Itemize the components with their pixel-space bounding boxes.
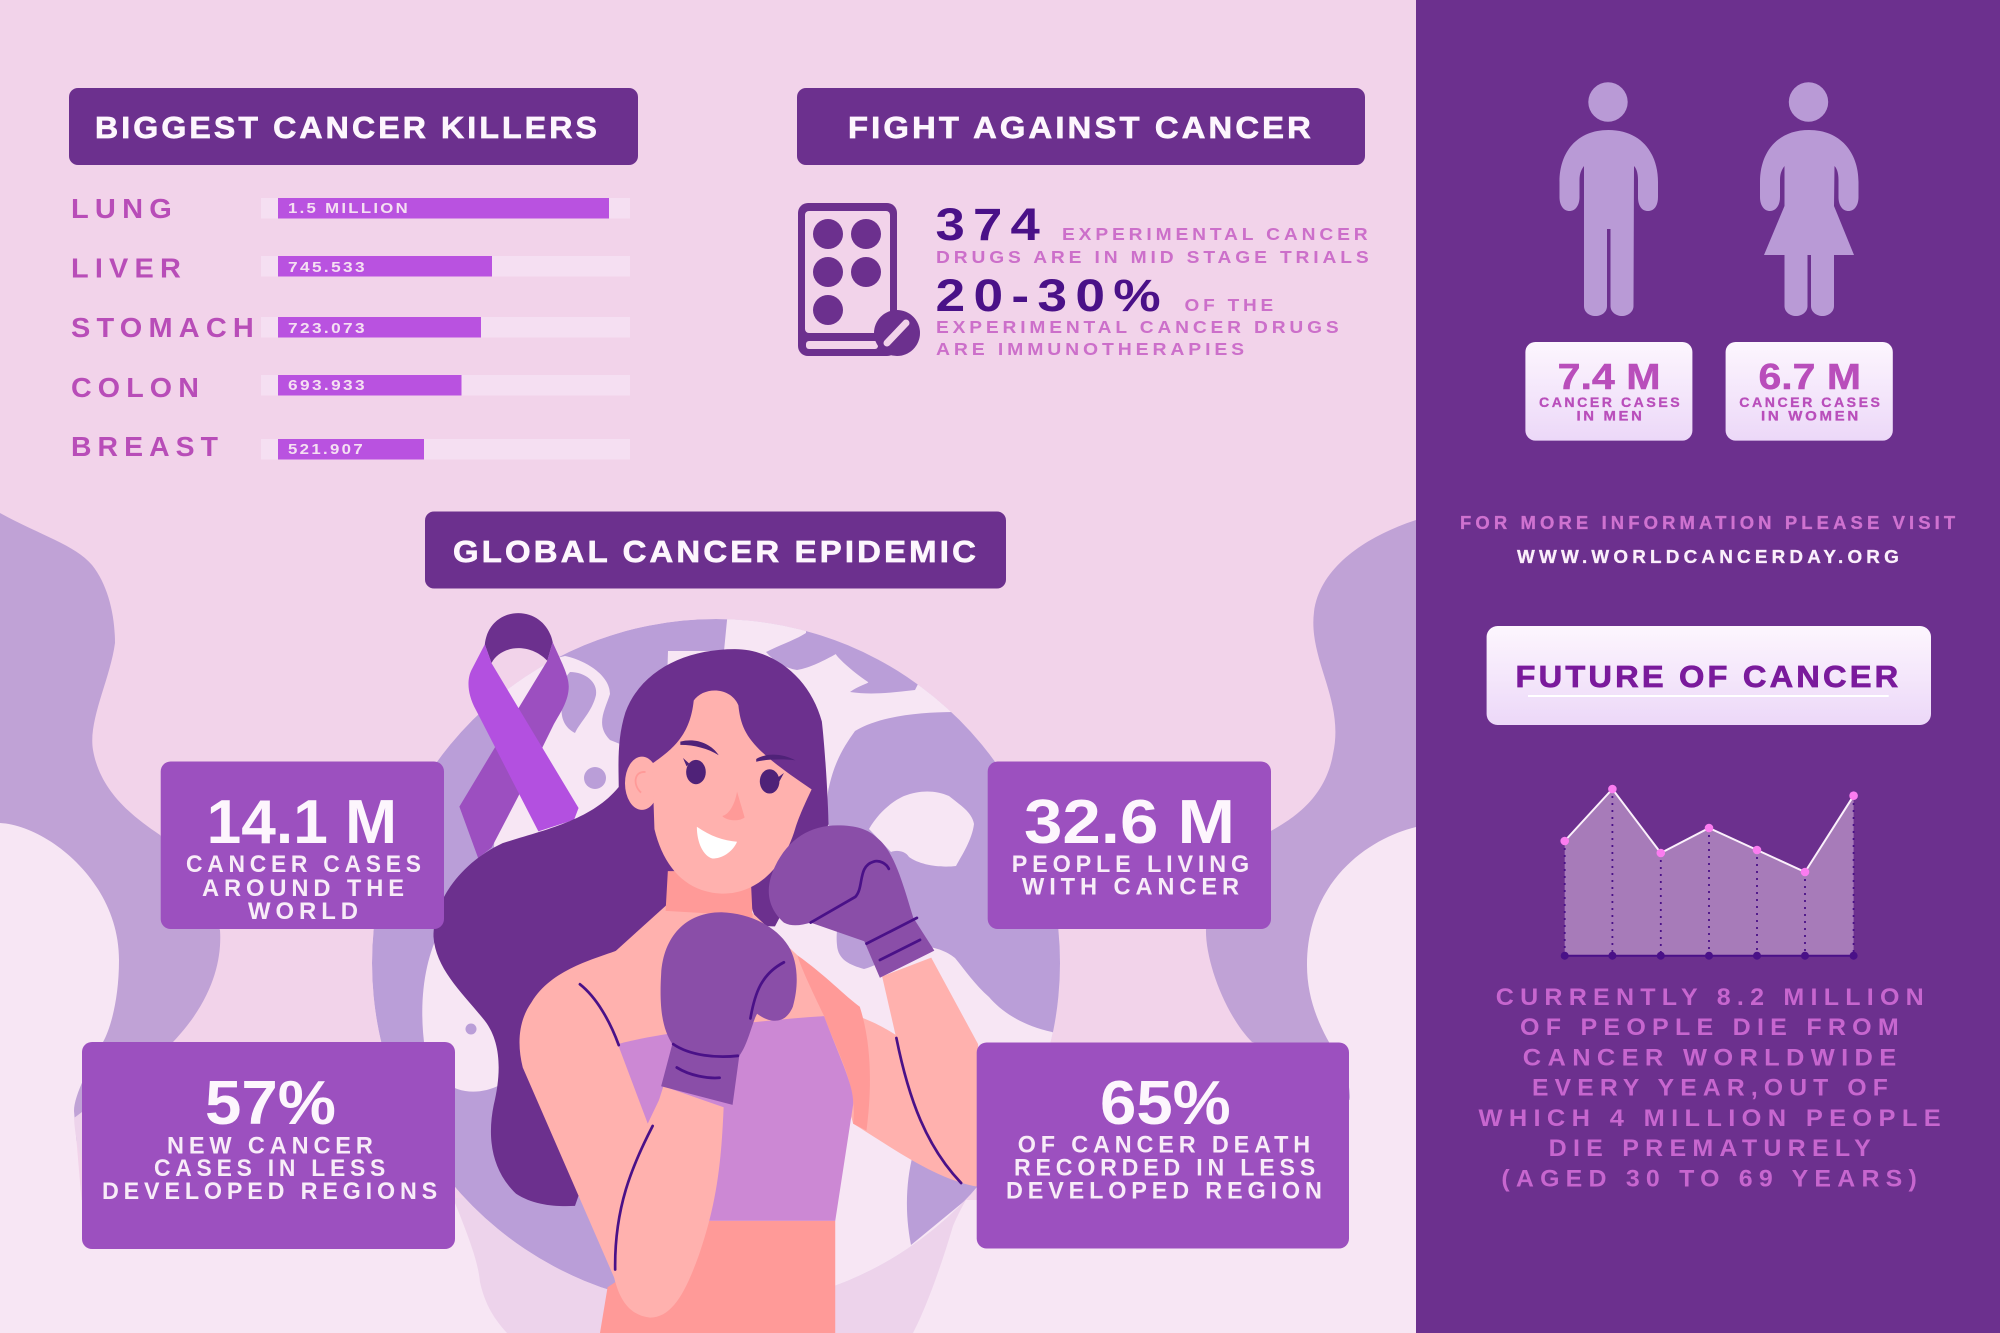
card: cases in women — [1726, 342, 1893, 441]
top garment — [618, 1016, 853, 1221]
card: cases in women: IN WOMEN — [1761, 408, 1861, 424]
heading: global cancer epidemic — [425, 512, 1006, 588]
forearm — [614, 1086, 724, 1318]
row: liver — [71, 252, 630, 284]
row: colon: COLON — [71, 372, 205, 403]
card: cases in women: CANCER CASES — [1739, 394, 1882, 410]
stat: 20-30%: ARE IMMUNOTHERAPIES — [936, 339, 1248, 359]
text: future of cancer description: CURRENTLY 8.2 MILLION — [1496, 984, 1930, 1011]
heading: FIGHT AGAINST CANCER — [848, 110, 1314, 145]
heading: BIGGEST CANCER KILLERS — [95, 110, 600, 145]
text: future of cancer description — [1478, 984, 1947, 1193]
callout: 65%: 65% — [1100, 1069, 1231, 1138]
area chart — [1560, 785, 1858, 960]
callout: 57%: CASES IN LESS — [154, 1155, 390, 1182]
text: future of cancer description: (AGED 30 TO 69 YEARS) — [1501, 1166, 1923, 1193]
panel: fight against cancer — [797, 88, 1372, 359]
callout: 65%: DEVELOPED REGION — [1006, 1177, 1327, 1204]
background blobs — [0, 513, 1416, 1333]
card: cases in men — [1525, 342, 1692, 441]
callout: 14.1 M — [161, 762, 444, 929]
icon: man — [1560, 82, 1658, 316]
text: future of cancer description: CANCER WORLDWIDE — [1523, 1045, 1902, 1072]
row: stomach: 723.073 — [288, 321, 367, 337]
icon: awareness ribbon — [459, 613, 579, 858]
eyes and brows — [680, 740, 796, 794]
woman boxer with ribbon — [433, 613, 978, 1333]
row: colon — [71, 372, 630, 403]
globe — [372, 610, 1070, 1310]
row: colon: 693.933 — [288, 378, 367, 394]
card: cases in men: 7.4 M — [1558, 356, 1661, 397]
text: future of cancer description: OF PEOPLE DIE FROM — [1520, 1014, 1905, 1041]
text: future of cancer description: EVERY YEAR,OUT OF — [1532, 1075, 1894, 1102]
callout: 65%: OF CANCER DEATH — [1018, 1132, 1315, 1159]
ear — [625, 757, 659, 810]
stat: 20-30%: 20-30% — [936, 270, 1169, 321]
heading — [69, 88, 638, 165]
row: liver: 745.533 — [288, 260, 367, 276]
row: breast: BREAST — [71, 431, 224, 462]
callout: 32.6 M: 32.6 M — [1024, 788, 1235, 857]
icon: pill blister pack — [798, 203, 920, 356]
row: lung: LUNG — [71, 193, 178, 224]
stat: 374: EXPERIMENTAL CANCER — [1062, 224, 1372, 244]
bar chart — [71, 193, 630, 462]
row: breast — [71, 431, 630, 462]
face — [652, 691, 812, 894]
row: stomach: STOMACH — [71, 312, 260, 343]
nose — [722, 792, 745, 820]
callout: 14.1 M: 14.1 M — [207, 788, 397, 857]
row: stomach — [71, 312, 630, 343]
stat: 20-30%: OF THE — [1184, 295, 1277, 315]
text: website: WWW.WORLDCANCERDAY.ORG — [1517, 547, 1903, 567]
neck shadow — [666, 871, 753, 918]
stat: 20-30% — [936, 270, 1342, 359]
callout: 57%: 57% — [205, 1069, 336, 1138]
chest skin — [580, 904, 824, 1044]
heading — [797, 88, 1365, 165]
stat: 374 — [936, 199, 1372, 267]
callout: 65%: RECORDED IN LESS — [1014, 1154, 1320, 1182]
boxing glove upper — [769, 825, 934, 978]
heading: global cancer epidemic: GLOBAL CANCER EPIDEMIC — [453, 534, 979, 569]
card: cases in women: 6.7 M — [1758, 356, 1861, 397]
callout: 32.6 M — [988, 762, 1271, 929]
boxing glove lower — [661, 912, 797, 1105]
callout: 14.1 M: WORLD — [248, 898, 363, 925]
callout: 57%: DEVELOPED REGIONS — [102, 1178, 442, 1205]
ear far side — [795, 789, 812, 813]
callout: 14.1 M: AROUND THE — [202, 875, 409, 902]
card: cases in men: CANCER CASES — [1539, 394, 1682, 410]
shoulder shadow — [797, 955, 870, 1131]
row: breast: 521.907 — [288, 442, 365, 458]
stat: 374: 374 — [936, 199, 1048, 250]
callout: 65% — [977, 1042, 1349, 1248]
skin under top — [619, 1049, 721, 1221]
text: future of cancer description: DIE PREMATURELY — [1549, 1135, 1877, 1162]
callout: 57% — [82, 1042, 455, 1249]
skirt — [600, 1221, 835, 1333]
stat: 374: DRUGS ARE IN MID STAGE TRIALS — [936, 247, 1372, 267]
body skin — [519, 899, 978, 1318]
panel: right sidebar — [1416, 0, 2000, 1333]
heading: future of cancer: FUTURE OF CANCER — [1516, 659, 1901, 694]
heading: future of cancer — [1487, 626, 1931, 725]
hair — [433, 649, 829, 1206]
callout: 14.1 M: CANCER CASES — [186, 851, 426, 878]
mouth — [697, 827, 737, 859]
panel: biggest cancer killers — [69, 88, 638, 462]
callout: 32.6 M: WITH CANCER — [1022, 874, 1244, 900]
row: liver: LIVER — [71, 252, 187, 284]
callout: 32.6 M: PEOPLE LIVING — [1012, 851, 1254, 878]
icon: woman — [1760, 82, 1858, 316]
text: more information: FOR MORE INFORMATION PLEASE VISIT — [1460, 513, 1959, 533]
card: cases in men: IN MEN — [1576, 408, 1644, 424]
row: lung — [71, 193, 630, 224]
arm lines — [580, 984, 961, 1269]
text: future of cancer description: WHICH 4 MILLION PEOPLE — [1478, 1105, 1947, 1132]
stat: 20-30%: EXPERIMENTAL CANCER DRUGS — [936, 317, 1342, 337]
row: lung: 1.5 MILLION — [288, 201, 410, 217]
callout: 57%: NEW CANCER — [167, 1132, 378, 1160]
